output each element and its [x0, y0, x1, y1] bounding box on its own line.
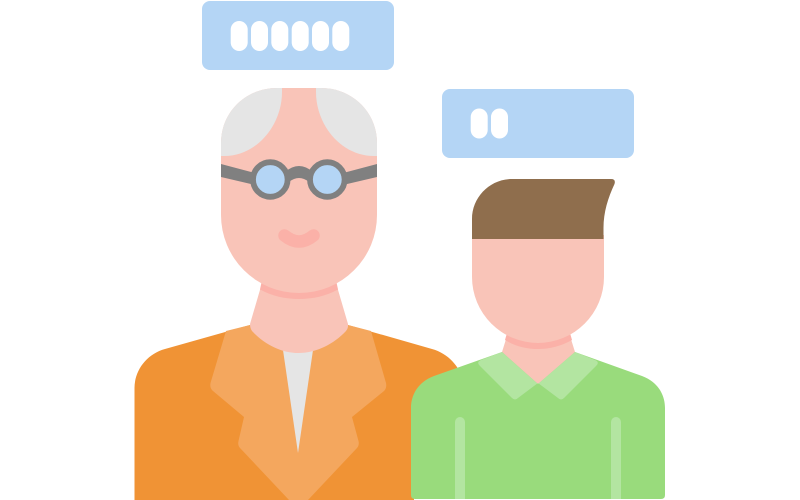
glasses: [221, 162, 377, 197]
neck: [502, 336, 575, 384]
grey hair left: [221, 88, 282, 156]
head: [221, 88, 377, 293]
neck: [250, 283, 348, 353]
collar: [478, 352, 598, 400]
jacket lapels: [210, 325, 386, 500]
smile: [284, 236, 314, 242]
speech bubble: older man: [202, 1, 394, 70]
grey hair right: [316, 88, 377, 156]
jacket: [134, 325, 464, 500]
sleeve stripe left: [455, 417, 465, 499]
younger man figure: [411, 179, 665, 499]
head: [472, 235, 604, 343]
brown hair: [472, 179, 615, 239]
white shirt: [283, 348, 313, 453]
sleeve stripe right: [611, 417, 621, 499]
speech bubble: younger man: [442, 89, 634, 158]
older man figure: [134, 88, 464, 500]
neck shadow: [260, 280, 338, 299]
neck shadow: [505, 333, 572, 349]
sweater: [411, 352, 665, 499]
